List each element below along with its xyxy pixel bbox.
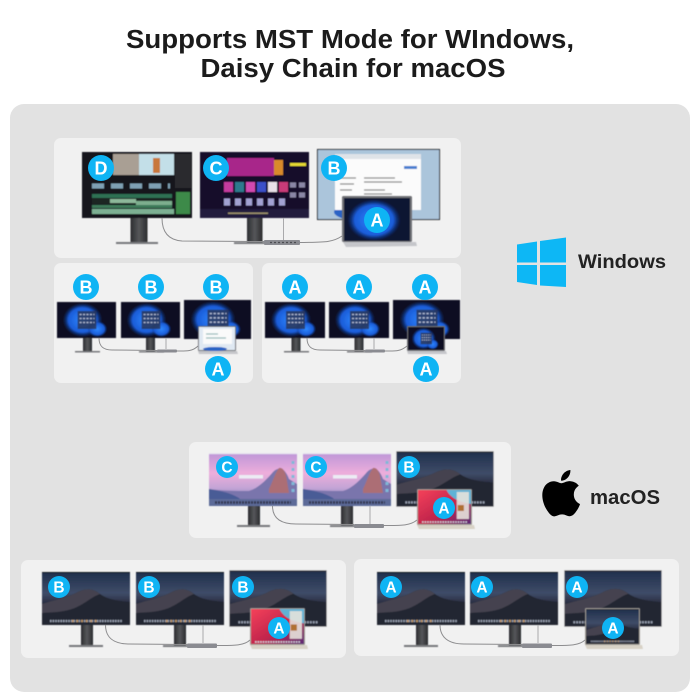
panel: macOS three displays C C B	[189, 442, 511, 538]
monitors	[42, 570, 327, 647]
badge B	[73, 274, 99, 300]
panel: macOS three displays A A A	[354, 559, 679, 656]
monitor B: browser window	[317, 149, 440, 222]
cables and hub	[99, 338, 198, 352]
badge B	[48, 576, 70, 598]
badge A	[282, 274, 308, 300]
badge B: B	[80, 278, 92, 298]
laptop A	[250, 608, 308, 649]
badge A	[380, 576, 402, 598]
badge D: D	[94, 158, 108, 178]
badge A: A	[352, 278, 366, 298]
monitors	[265, 300, 460, 352]
badge C	[216, 456, 238, 478]
badge C: C	[221, 460, 233, 476]
badge A: A	[212, 360, 224, 380]
badge A	[433, 497, 455, 519]
badge A: A	[370, 210, 384, 230]
laptop A	[417, 489, 475, 529]
monitors	[209, 451, 494, 527]
panel: Windows MST three displays A A A	[262, 263, 461, 383]
badge C: C	[210, 158, 222, 178]
badge A	[205, 356, 231, 382]
title: Daisy Chain for macOS	[200, 55, 506, 83]
monitors	[377, 570, 662, 647]
badge A	[413, 356, 439, 382]
cables and hub	[440, 625, 585, 648]
badge C: C	[310, 460, 322, 476]
Windows label text: Windows	[578, 251, 666, 273]
badge C	[203, 155, 229, 181]
panel: macOS three displays B B B	[21, 560, 346, 658]
laptop A with window	[198, 326, 238, 354]
monitor D: video editing	[82, 152, 192, 244]
badge A: A	[438, 500, 450, 518]
macOS label text: macOS	[590, 487, 660, 509]
badge A	[346, 274, 372, 300]
badge B	[138, 274, 164, 300]
panel: Windows MST four-display setup	[54, 138, 461, 258]
macOS label with logo	[542, 470, 660, 516]
badge A: A	[273, 620, 285, 638]
cables and hub	[272, 506, 417, 528]
badge A	[566, 576, 588, 598]
icon: Windows logo	[517, 238, 566, 287]
laptop A	[342, 196, 417, 247]
badge B: B	[53, 580, 65, 596]
cables and hub	[106, 625, 250, 648]
badge A: A	[288, 278, 302, 298]
badge B	[321, 155, 347, 181]
badge A: A	[607, 620, 619, 638]
badge C	[305, 456, 327, 478]
title: Supports MST Mode for WIndows,	[126, 26, 574, 54]
badge B: B	[210, 278, 222, 298]
badge A: A	[385, 580, 397, 596]
badge B: B	[403, 460, 415, 476]
badge B: B	[237, 580, 249, 596]
icon: Apple logo	[542, 470, 580, 516]
badge B	[398, 456, 420, 478]
badge A	[412, 274, 438, 300]
laptop A	[585, 608, 643, 649]
badge A	[602, 617, 624, 639]
badge B	[203, 274, 229, 300]
badge A: A	[476, 580, 488, 596]
badge B: B	[144, 278, 158, 298]
badge B: B	[328, 158, 340, 178]
badge D	[88, 155, 114, 181]
laptop A	[407, 326, 447, 354]
cables and hub	[307, 338, 407, 352]
badge A	[268, 617, 290, 639]
badge A: A	[571, 580, 583, 596]
badge A: A	[420, 360, 432, 380]
badge B: B	[143, 580, 155, 596]
title	[126, 26, 574, 83]
badge B	[232, 576, 254, 598]
badge A	[471, 576, 493, 598]
panel: Windows MST three displays B B B	[54, 263, 253, 383]
Windows label with logo	[517, 238, 666, 287]
badge B	[138, 576, 160, 598]
monitors	[57, 300, 251, 352]
monitor C: music app	[200, 152, 309, 244]
cables and hub	[162, 218, 342, 245]
badge A: A	[418, 278, 432, 298]
badge A	[364, 207, 390, 233]
